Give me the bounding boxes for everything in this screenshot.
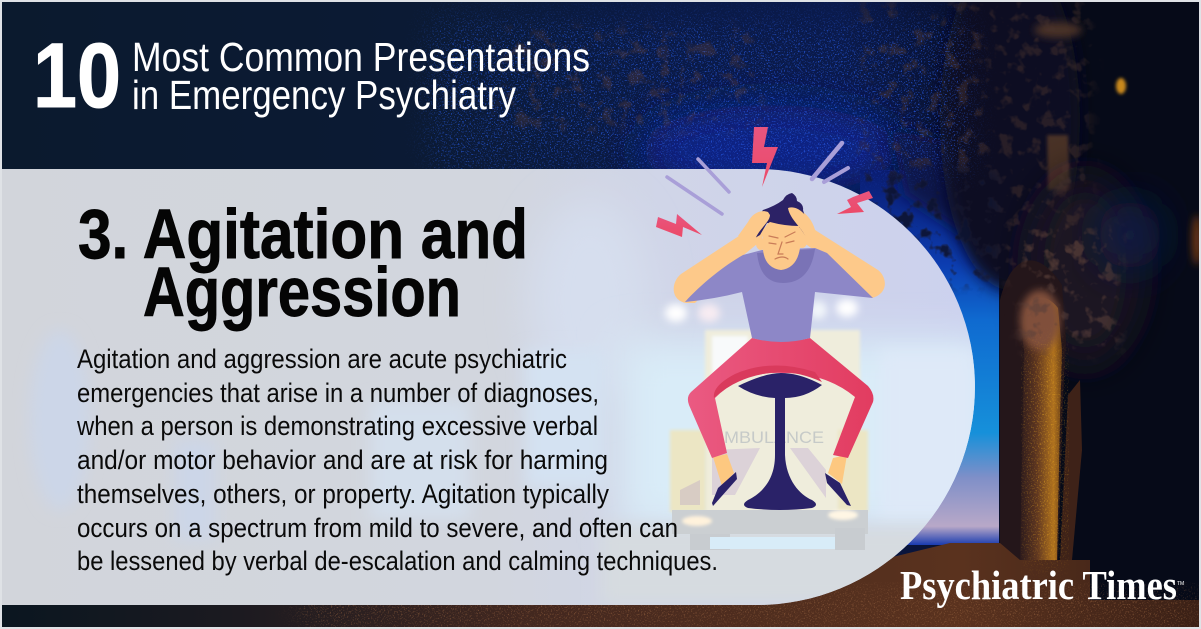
hands on head (738, 207, 822, 240)
head (755, 193, 807, 270)
body text block: be lessened by verbal de-escalation and calming techniques. (77, 546, 718, 576)
body text block: Agitation and aggression are acute psychiatric (77, 344, 567, 374)
heading: 3. Agitation and Aggression (78, 195, 528, 331)
logo: Psychiatric Times: TM (1177, 581, 1184, 587)
body text block: and/or motor behavior and are at risk for harming (77, 445, 608, 475)
title: 10 Most Common Presentations in Emergency Psychiatry (33, 25, 590, 127)
arms (674, 207, 885, 303)
ambulance body (670, 330, 868, 550)
panel: translucent rounded content panel with ambulance (2, 169, 990, 605)
illustration: agitated person on a stool (656, 127, 885, 510)
icon: stress lines (667, 143, 848, 214)
title: 10 Most Common Presentations in Emergency Psychiatry: in Emergency Psychiatry (132, 72, 516, 118)
stool (738, 373, 822, 510)
legs and feet (688, 338, 873, 506)
heading: 3. Agitation and Aggression: 3. Agitation and (78, 195, 528, 273)
icon: lightning bolts (656, 127, 873, 237)
ambulance body: MBULANCE (724, 428, 824, 447)
heading: 3. Agitation and Aggression: Aggression (143, 253, 461, 331)
title: 10 Most Common Presentations in Emergency Psychiatry: 10 (33, 25, 121, 127)
ambulance lights (665, 299, 858, 322)
title: 10 Most Common Presentations in Emergency Psychiatry: Most Common Presentations (132, 34, 590, 80)
body text block (76, 344, 718, 576)
body text block: occurs on a spectrum from mild to severe, and often can (77, 513, 678, 543)
body text block: themselves, others, or property. Agitation typically (77, 479, 609, 509)
neck shadow (757, 249, 815, 283)
body text block: when a person is demonstrating excessive verbal (76, 411, 598, 441)
shirt (685, 248, 873, 342)
body text block: emergencies that arise in a number of diagnoses, (77, 378, 599, 408)
